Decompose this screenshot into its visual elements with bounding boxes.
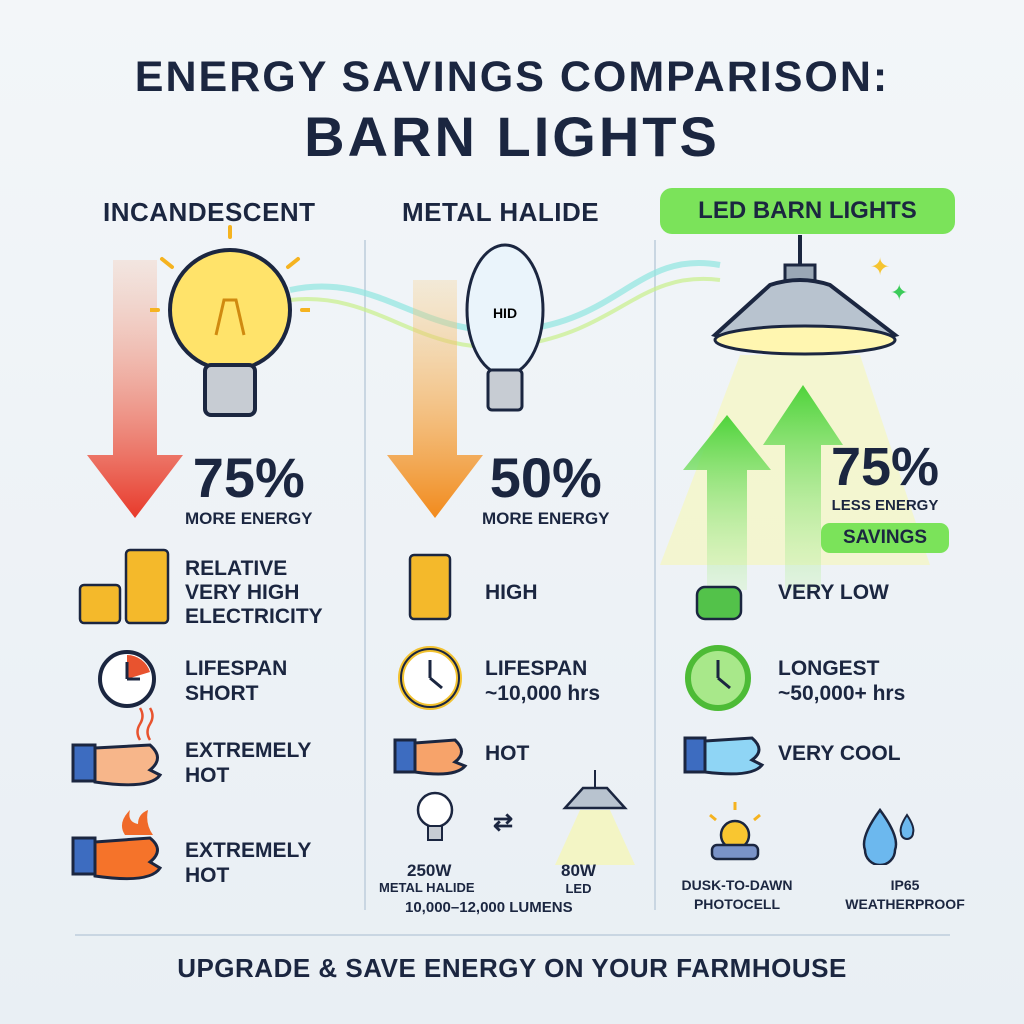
swap comparison: [379, 770, 635, 916]
stat: 75% more: MORE ENERGY: [185, 509, 313, 528]
text: longest 50000: ~50,000+ hrs: [778, 682, 905, 705]
icon: coins tall: [78, 548, 170, 624]
text: high: HIGH: [485, 581, 538, 604]
text: lifespan 10000: LIFESPAN: [485, 657, 587, 680]
icon: HID bulb: [466, 244, 544, 412]
title: ENERGY SAVINGS COMPARISON:: [135, 53, 889, 101]
stat: 50% more: [482, 446, 610, 528]
title: [135, 53, 889, 168]
text: extremely hot 1: EXTREMELY: [185, 739, 311, 762]
stat: 75% less: SAVINGS: [843, 527, 927, 548]
icon: cash stack: [696, 586, 742, 620]
text: extremely hot 2: EXTREMELY: [185, 839, 311, 862]
text: extremely hot 2: [185, 839, 311, 887]
text: relative very high electricity: ELECTRICITY: [185, 605, 323, 628]
text: longest 50000: LONGEST: [778, 657, 880, 680]
icon: water drops: [862, 808, 914, 865]
stat: 75% less: [821, 437, 949, 553]
text: hot: HOT: [485, 742, 529, 765]
stat: 75% less: LESS ENERGY: [832, 497, 938, 514]
stat: 50% more: MORE ENERGY: [482, 509, 610, 528]
text: lifespan 10000: ~10,000 hrs: [485, 682, 600, 705]
text: lifespan 10000: [485, 657, 600, 705]
arrows: green up: [683, 385, 843, 590]
text: extremely hot 2: HOT: [185, 864, 229, 887]
text: IP65: WEATHERPROOF: [845, 896, 965, 912]
text: longest 50000: [778, 657, 905, 705]
text: 80W LED: [561, 861, 596, 896]
icon: barn lamp with light: ✦: [890, 280, 908, 305]
text: IP65: IP65: [891, 877, 919, 893]
text: lifespan short: LIFESPAN: [185, 657, 287, 680]
icon: incandescent bulb: [150, 225, 310, 417]
footer: UPGRADE & SAVE ENERGY ON YOUR FARMHOUSE: [177, 953, 847, 983]
icon: small bulb: [416, 792, 454, 841]
icon: barn lamp with light: ✦: [870, 254, 890, 281]
heading: metal halide: METAL HALIDE: [402, 197, 599, 227]
icon: coins medium: [408, 554, 452, 620]
text: 250W: 250W: [407, 861, 451, 880]
text: dusk to dawn: [682, 877, 792, 912]
icon: swap arrows: ⇄: [493, 809, 513, 836]
stat: 50% more: 50%: [490, 446, 602, 509]
heading: LED: [660, 188, 955, 234]
text: lifespan short: [185, 657, 287, 705]
title: BARN LIGHTS: [304, 105, 720, 168]
swap comparison: 10,000–12,000 LUMENS: [405, 899, 573, 916]
text: 80W LED: LED: [565, 881, 591, 896]
heading: incandescent: INCANDESCENT: [103, 197, 316, 227]
heading: LED: LED BARN LIGHTS: [698, 197, 917, 224]
text: dusk to dawn: PHOTOCELL: [694, 896, 780, 912]
icon: small lamp: [555, 770, 635, 865]
text: 80W LED: 80W: [561, 861, 596, 880]
icon: photocell: [709, 802, 761, 860]
stat: 75% less: 75%: [831, 437, 939, 497]
text: lifespan short: SHORT: [185, 682, 258, 705]
arrow: orange down: [387, 280, 483, 518]
stat: 75% more: [185, 446, 313, 528]
icon: HID bulb: HID: [493, 305, 517, 321]
stat: 75% more: 75%: [193, 446, 305, 509]
text: relative very high electricity: [185, 557, 323, 628]
text: relative very high electricity: RELATIVE: [185, 557, 287, 580]
text: extremely hot 1: [185, 739, 311, 787]
text: extremely hot 1: HOT: [185, 764, 229, 787]
swap comparison: METAL HALIDE: [379, 880, 475, 895]
text: very cool: VERY COOL: [778, 742, 901, 765]
text: IP65: [845, 877, 965, 912]
text: relative very high electricity: VERY HIGH: [185, 581, 299, 604]
text: dusk to dawn: DUSK-TO-DAWN: [682, 877, 792, 893]
arrow: red down: [87, 260, 183, 518]
icon: barn lamp with light: [660, 235, 930, 565]
text: very low: VERY LOW: [778, 581, 889, 604]
